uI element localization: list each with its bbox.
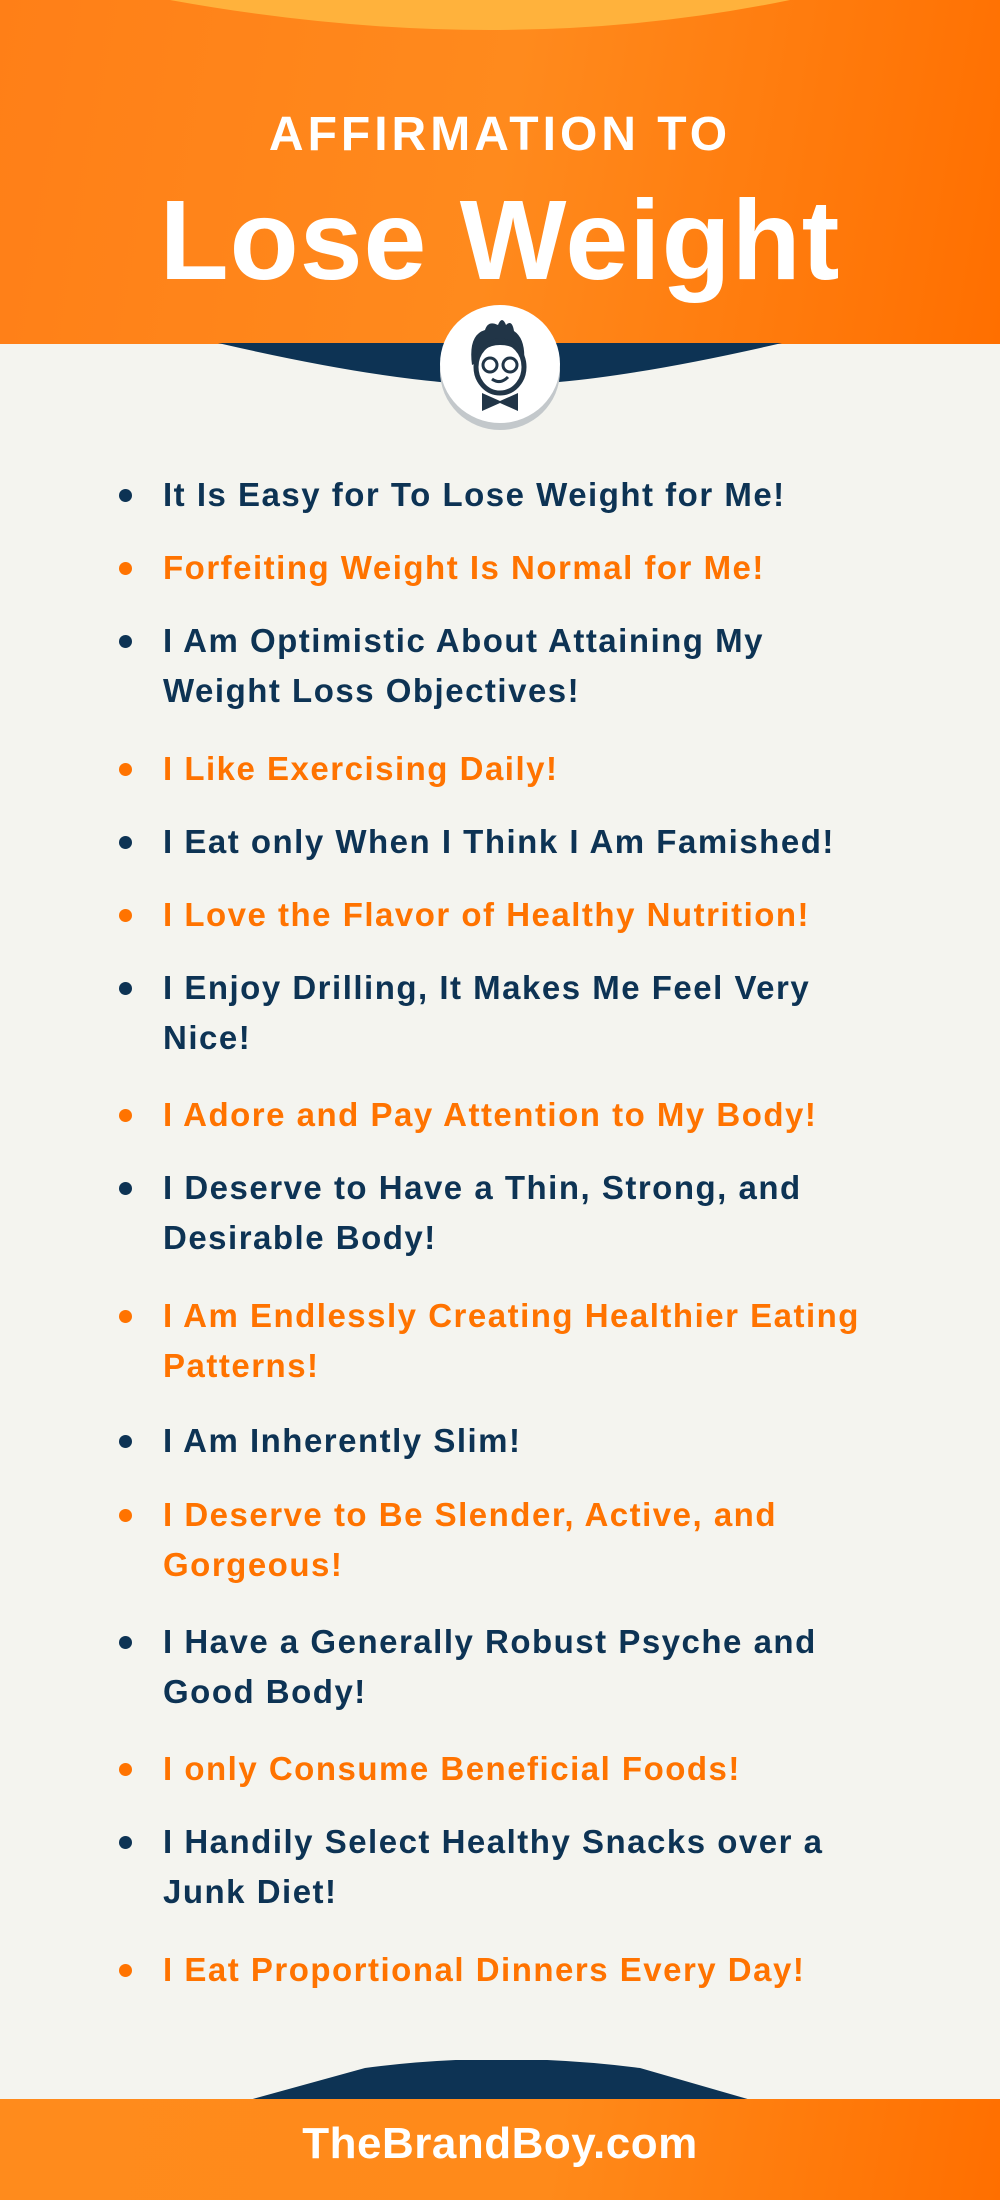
item 1 [119,476,786,513]
affirmation list: I Love the Flavor of Healthy Nutrition! [163,896,810,933]
affirmation list: Patterns! [163,1347,320,1384]
affirmation list: Forfeiting Weight Is Normal for Me! [163,549,765,586]
item 14 [119,1750,741,1787]
affirmation list: I Handily Select Healthy Snacks over a [163,1823,823,1860]
item 10 [119,1297,860,1384]
navy mound above footer [252,2060,748,2099]
affirmation list: I Enjoy Drilling, It Makes Me Feel Very [163,969,810,1006]
affirmation list: I Eat only When I Think I Am Famished! [163,823,835,860]
item 5 [119,823,835,860]
item 3 [119,622,764,709]
item 15 [119,1823,823,1910]
affirmation list: It Is Easy for To Lose Weight for Me! [163,476,786,513]
affirmation list: I Adore and Pay Attention to My Body! [163,1096,817,1133]
footer [0,2099,1000,2200]
item 8 [119,1096,817,1133]
item 7 [119,969,810,1056]
footer text: TheBrandBoy.com [302,2119,698,2168]
affirmation list: I Have a Generally Robust Psyche and [163,1623,817,1660]
affirmation list: I Am Optimistic About Attaining My [163,622,764,659]
affirmation list: Desirable Body! [163,1219,437,1256]
affirmation list: I Like Exercising Daily! [163,750,558,787]
affirmation list: Junk Diet! [163,1873,338,1910]
item 9 [119,1169,802,1256]
title line 1: AFFIRMATION TO [269,108,731,161]
affirmation list: I Am Inherently Slim! [163,1422,522,1459]
affirmation list: I Deserve to Be Slender, Active, and [163,1496,777,1533]
affirmation list: I only Consume Beneficial Foods! [163,1750,741,1787]
item 11 [119,1422,522,1459]
item 2 [119,549,765,586]
affirmation list: Gorgeous! [163,1546,343,1583]
title line 2: Lose Weight [160,177,840,303]
item 4 [119,750,558,787]
affirmation list: Good Body! [163,1673,367,1710]
item 13 [119,1623,817,1710]
affirmation list: I Eat Proportional Dinners Every Day! [163,1951,805,1988]
navy curve under header [218,343,782,382]
affirmation list: I Am Endlessly Creating Healthier Eating [163,1297,860,1334]
affirmation list: Weight Loss Objectives! [163,672,580,709]
item 12 [119,1496,777,1583]
item 16 [119,1951,805,1988]
affirmation list: Nice! [163,1019,251,1056]
item 6 [119,896,810,933]
header [0,0,1000,344]
logo [440,305,560,430]
affirmation list: I Deserve to Have a Thin, Strong, and [163,1169,802,1206]
